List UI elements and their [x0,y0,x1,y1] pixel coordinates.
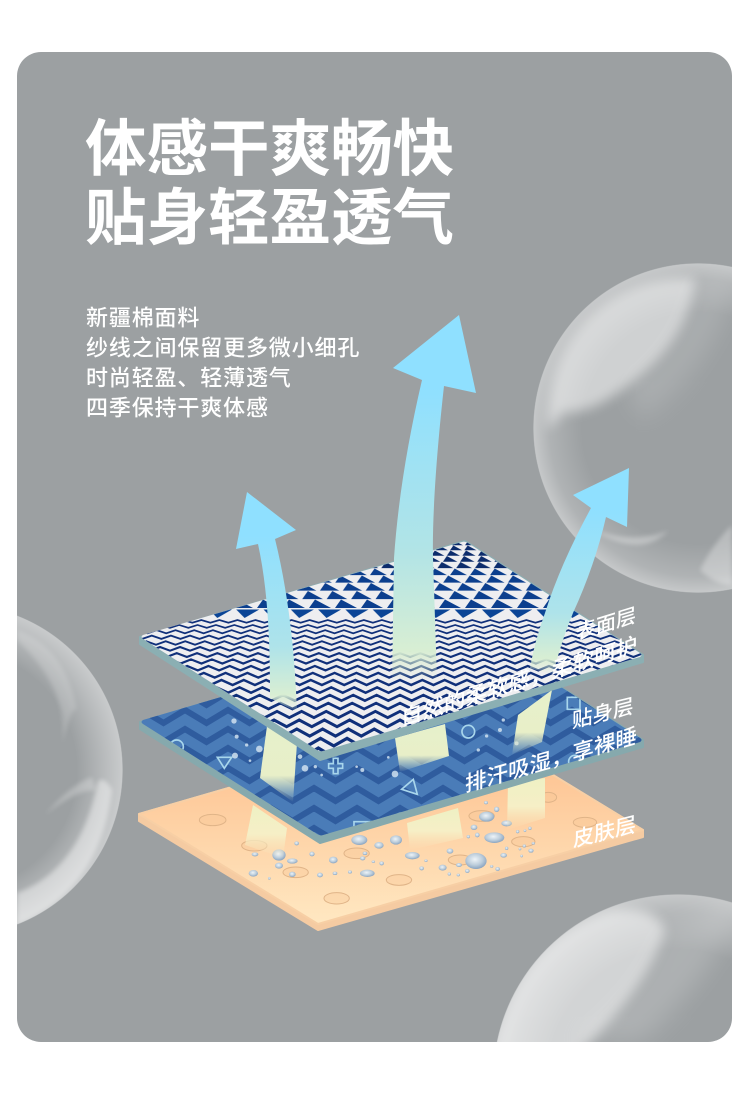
title line 2: 贴身轻盈透气 [85,184,454,253]
layer: skin [139,720,643,930]
labels on layers [401,604,637,852]
skin pores [199,792,597,904]
title line 1: 体感干爽畅快 [85,115,454,184]
arrow: center [392,315,476,680]
bubble: lower right [496,894,732,1042]
arrow: left [236,492,297,712]
label: surface layer benefit: 自然的柔软感，柔软呵护 [401,632,637,731]
beam: left [245,805,287,858]
layer: blue inner fabric [139,688,644,844]
beam: left [260,726,297,802]
fabric surface [142,542,642,752]
airflow beams over blue layer [260,690,552,802]
bubble: left [17,604,123,936]
layer: top chevron fabric [139,540,644,761]
bubble: upper right [533,263,732,593]
chevron pattern [142,619,642,752]
body text [86,306,360,420]
triangle pattern [214,542,580,618]
text line 4: 四季保持干爽体感 [86,396,269,420]
beam: right [512,690,552,755]
shapes on fabric [170,697,581,837]
airflow beams over skin layer [245,778,545,858]
label: next-to-skin layer: 贴身层 [572,695,633,733]
water drops on skin [249,801,535,880]
beam: right [507,778,545,830]
layer edge [140,625,643,843]
text line 1: 新疆棉面料 [86,306,200,330]
title [85,115,454,253]
beam: center [395,724,449,772]
label: skin layer: 皮肤层 [573,813,636,852]
arrow: right [530,468,629,675]
label: next-to-skin benefit: 排汗吸湿，享裸睡 [465,723,637,797]
layer edge [140,541,643,760]
beam: center [407,808,463,850]
text line 2: 纱线之间保留更多微小细孔 [86,336,360,360]
fabric surface [142,688,642,836]
text line 3: 时尚轻盈、轻薄透气 [86,366,292,390]
label: surface layer: 表面层 [576,604,636,645]
sweat droplets [231,718,519,777]
